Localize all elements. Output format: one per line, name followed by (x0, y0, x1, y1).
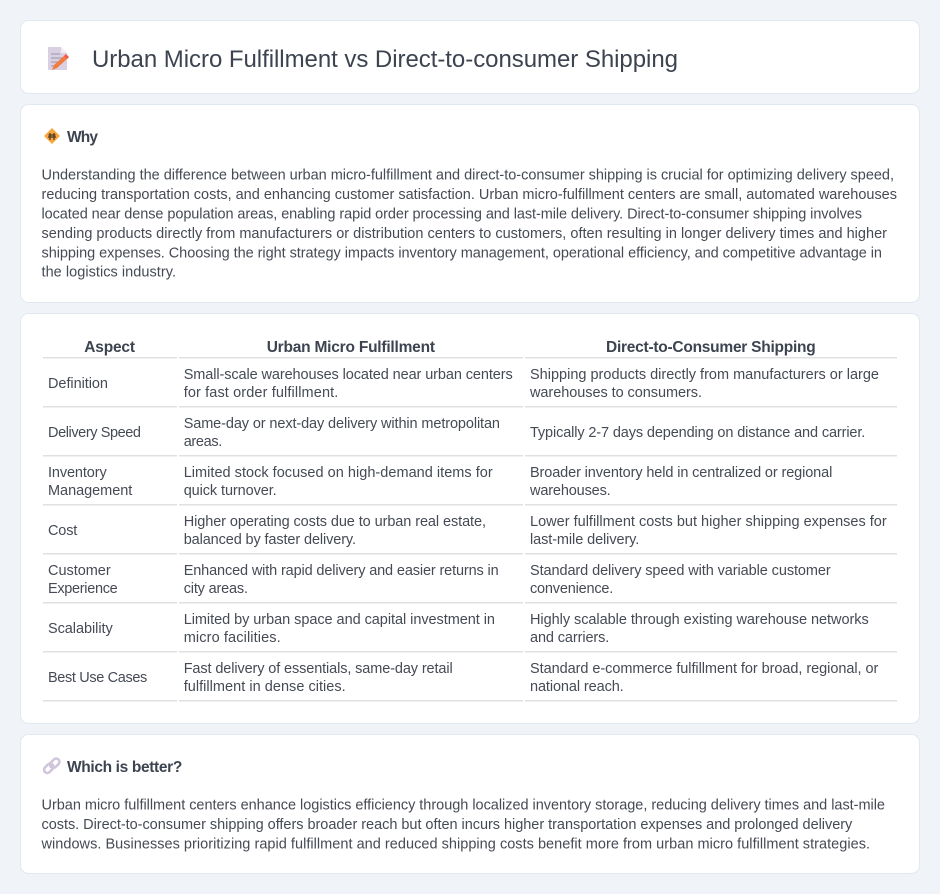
panel: header (20, 20, 920, 94)
row: customer experience: Enhanced with rapid delivery and easier returns in (184, 563, 499, 579)
row: scalability: and carriers. (530, 630, 609, 646)
row: scalability: Highly scalable through existing warehouse networks (530, 612, 869, 628)
row: customer experience (43, 563, 897, 604)
row: inventory management: Inventory (48, 465, 107, 481)
which is better paragraph: Urban micro fulfillment centers enhance logistics efficiency through localized inventory storage, reducing delivery times and last-mile (42, 798, 885, 814)
why paragraph: located near dense population areas, enabling rapid order processing and last-mile delivery. Direct-to-consumer shipping involves (42, 206, 862, 222)
row: best use cases: Fast delivery of essentials, same-day retail (184, 661, 453, 677)
heading: why: Why (67, 129, 98, 146)
panel: which is better (20, 734, 920, 874)
row: delivery speed (43, 416, 897, 456)
why paragraph: reducing transportation costs, and enhancing customer satisfaction. Urban micro-fulfillment centers are small, automated warehouses (42, 187, 897, 203)
row: best use cases (43, 661, 897, 702)
row: customer experience: city areas. (184, 581, 248, 597)
row: customer experience: Experience (48, 581, 118, 597)
row: definition: Shipping products directly from manufacturers or large (530, 367, 879, 383)
row: customer experience: convenience. (530, 581, 613, 597)
which is better paragraph (40, 798, 885, 852)
row: customer experience: Standard delivery speed with variable customer (530, 563, 831, 579)
row: scalability (43, 612, 897, 652)
row: delivery speed: Delivery Speed (48, 425, 141, 441)
icon: memo with pencil (48, 47, 69, 70)
why paragraph: Understanding the difference between urban micro-fulfillment and direct-to-consumer shipping is crucial for optimizing delivery speed, (42, 168, 894, 184)
row: definition: Definition (48, 376, 108, 392)
row: definition: for fast order fulfillment. (184, 385, 338, 401)
row: definition: warehouses to consumers. (529, 385, 702, 401)
why paragraph: sending products directly from manufacturers or distribution centers to customers, often resulting in longer delivery times and higher (42, 226, 887, 242)
why paragraph: the logistics industry. (42, 264, 176, 280)
row: cost: Cost (48, 523, 77, 539)
row: cost: last-mile delivery. (530, 532, 639, 548)
icon: chain link (43, 757, 61, 774)
row: delivery speed: areas. (184, 434, 222, 450)
row: scalability: micro facilities. (184, 630, 281, 646)
heading: which is better: Which is better? (67, 759, 182, 776)
panel: comparison table (20, 314, 920, 724)
table header row: Urban Micro Fulfillment (267, 339, 435, 356)
row: definition (43, 367, 897, 408)
row: scalability: Scalability (48, 621, 113, 637)
table header row: Aspect (84, 339, 135, 356)
why paragraph (42, 168, 897, 280)
row: definition: Small-scale warehouses located near urban centers (184, 367, 513, 383)
row: best use cases: Best Use Cases (48, 670, 147, 686)
row: best use cases: Standard e-commerce fulfillment for broad, regional, or (530, 661, 878, 677)
row: inventory management: Management (48, 483, 132, 499)
table header row (43, 339, 897, 358)
icon: orange diamond sign (44, 128, 60, 144)
row: scalability: Limited by urban space and capital investment in (184, 612, 495, 628)
why paragraph: shipping expenses. Choosing the right strategy impacts inventory management, operational efficiency, and competitive advantage in (42, 246, 882, 262)
row: inventory management: Broader inventory held in centralized or regional (530, 465, 832, 481)
row: inventory management: quick turnover. (184, 483, 277, 499)
row: inventory management (43, 465, 897, 506)
row: best use cases: fulfillment in dense cities. (184, 679, 346, 695)
table header row: Direct-to-Consumer Shipping (606, 339, 816, 356)
title: Urban Micro Fulfillment vs Direct-to-consumer Shipping (92, 46, 678, 73)
which is better paragraph: costs. Direct-to-consumer shipping offers broader reach but often incurs higher transportation expenses and prolonged delivery (42, 817, 853, 833)
row: cost: Lower fulfillment costs but higher shipping expenses for (530, 514, 887, 530)
row: delivery speed: Same-day or next-day delivery within metropolitan (184, 416, 500, 432)
row: inventory management: warehouses. (529, 483, 611, 499)
row: customer experience: Customer (48, 563, 111, 579)
row: inventory management: Limited stock focused on high-demand items for (184, 465, 493, 481)
row: delivery speed: Typically 2-7 days depending on distance and carrier. (530, 425, 865, 441)
row: cost (43, 514, 897, 554)
which is better paragraph: windows. Businesses prioritizing rapid fulfillment and reduced shipping costs benefit more from urban micro fulfillment strategies. (40, 836, 870, 852)
panel: why (20, 104, 920, 302)
row: cost: balanced by faster delivery. (184, 532, 356, 548)
row: best use cases: national reach. (530, 679, 624, 695)
row: cost: Higher operating costs due to urban real estate, (184, 514, 486, 530)
